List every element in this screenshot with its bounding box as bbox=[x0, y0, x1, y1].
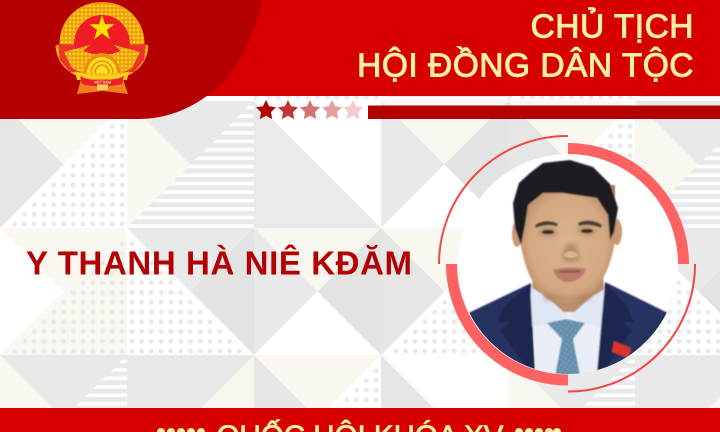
rating stars bbox=[256, 100, 363, 119]
header dark red corner shape bbox=[0, 0, 262, 119]
title bbox=[357, 8, 694, 84]
neck bbox=[531, 278, 605, 313]
lapels bbox=[497, 285, 535, 372]
person name: Y THANH HÀ NIÊ KĐĂM bbox=[26, 244, 413, 282]
eyes bbox=[542, 230, 554, 234]
shirt bbox=[532, 310, 602, 373]
lapel pin bbox=[612, 341, 631, 358]
icon: national emblem bbox=[56, 2, 148, 94]
eyebrows bbox=[535, 221, 558, 228]
header rule bbox=[368, 106, 720, 119]
hair bbox=[513, 160, 618, 245]
mouth bbox=[553, 268, 586, 282]
emblem text: VIỆT NAM bbox=[94, 80, 111, 84]
title: HỘI ĐỒNG DÂN TỘC bbox=[357, 46, 694, 84]
footer band bbox=[0, 408, 720, 432]
icon: emblem star bbox=[89, 15, 115, 39]
ears bbox=[512, 221, 522, 247]
portrait ring bbox=[439, 136, 695, 392]
face bbox=[520, 185, 615, 303]
eye shadow bbox=[539, 227, 596, 300]
title: CHỦ TỊCH bbox=[531, 8, 694, 46]
suit bbox=[469, 281, 667, 368]
portrait photo bbox=[458, 154, 678, 385]
footer right dots bbox=[515, 428, 561, 432]
footer left dots bbox=[157, 428, 205, 432]
nose bbox=[564, 251, 578, 258]
tie bbox=[547, 319, 585, 376]
header band bbox=[0, 0, 720, 96]
